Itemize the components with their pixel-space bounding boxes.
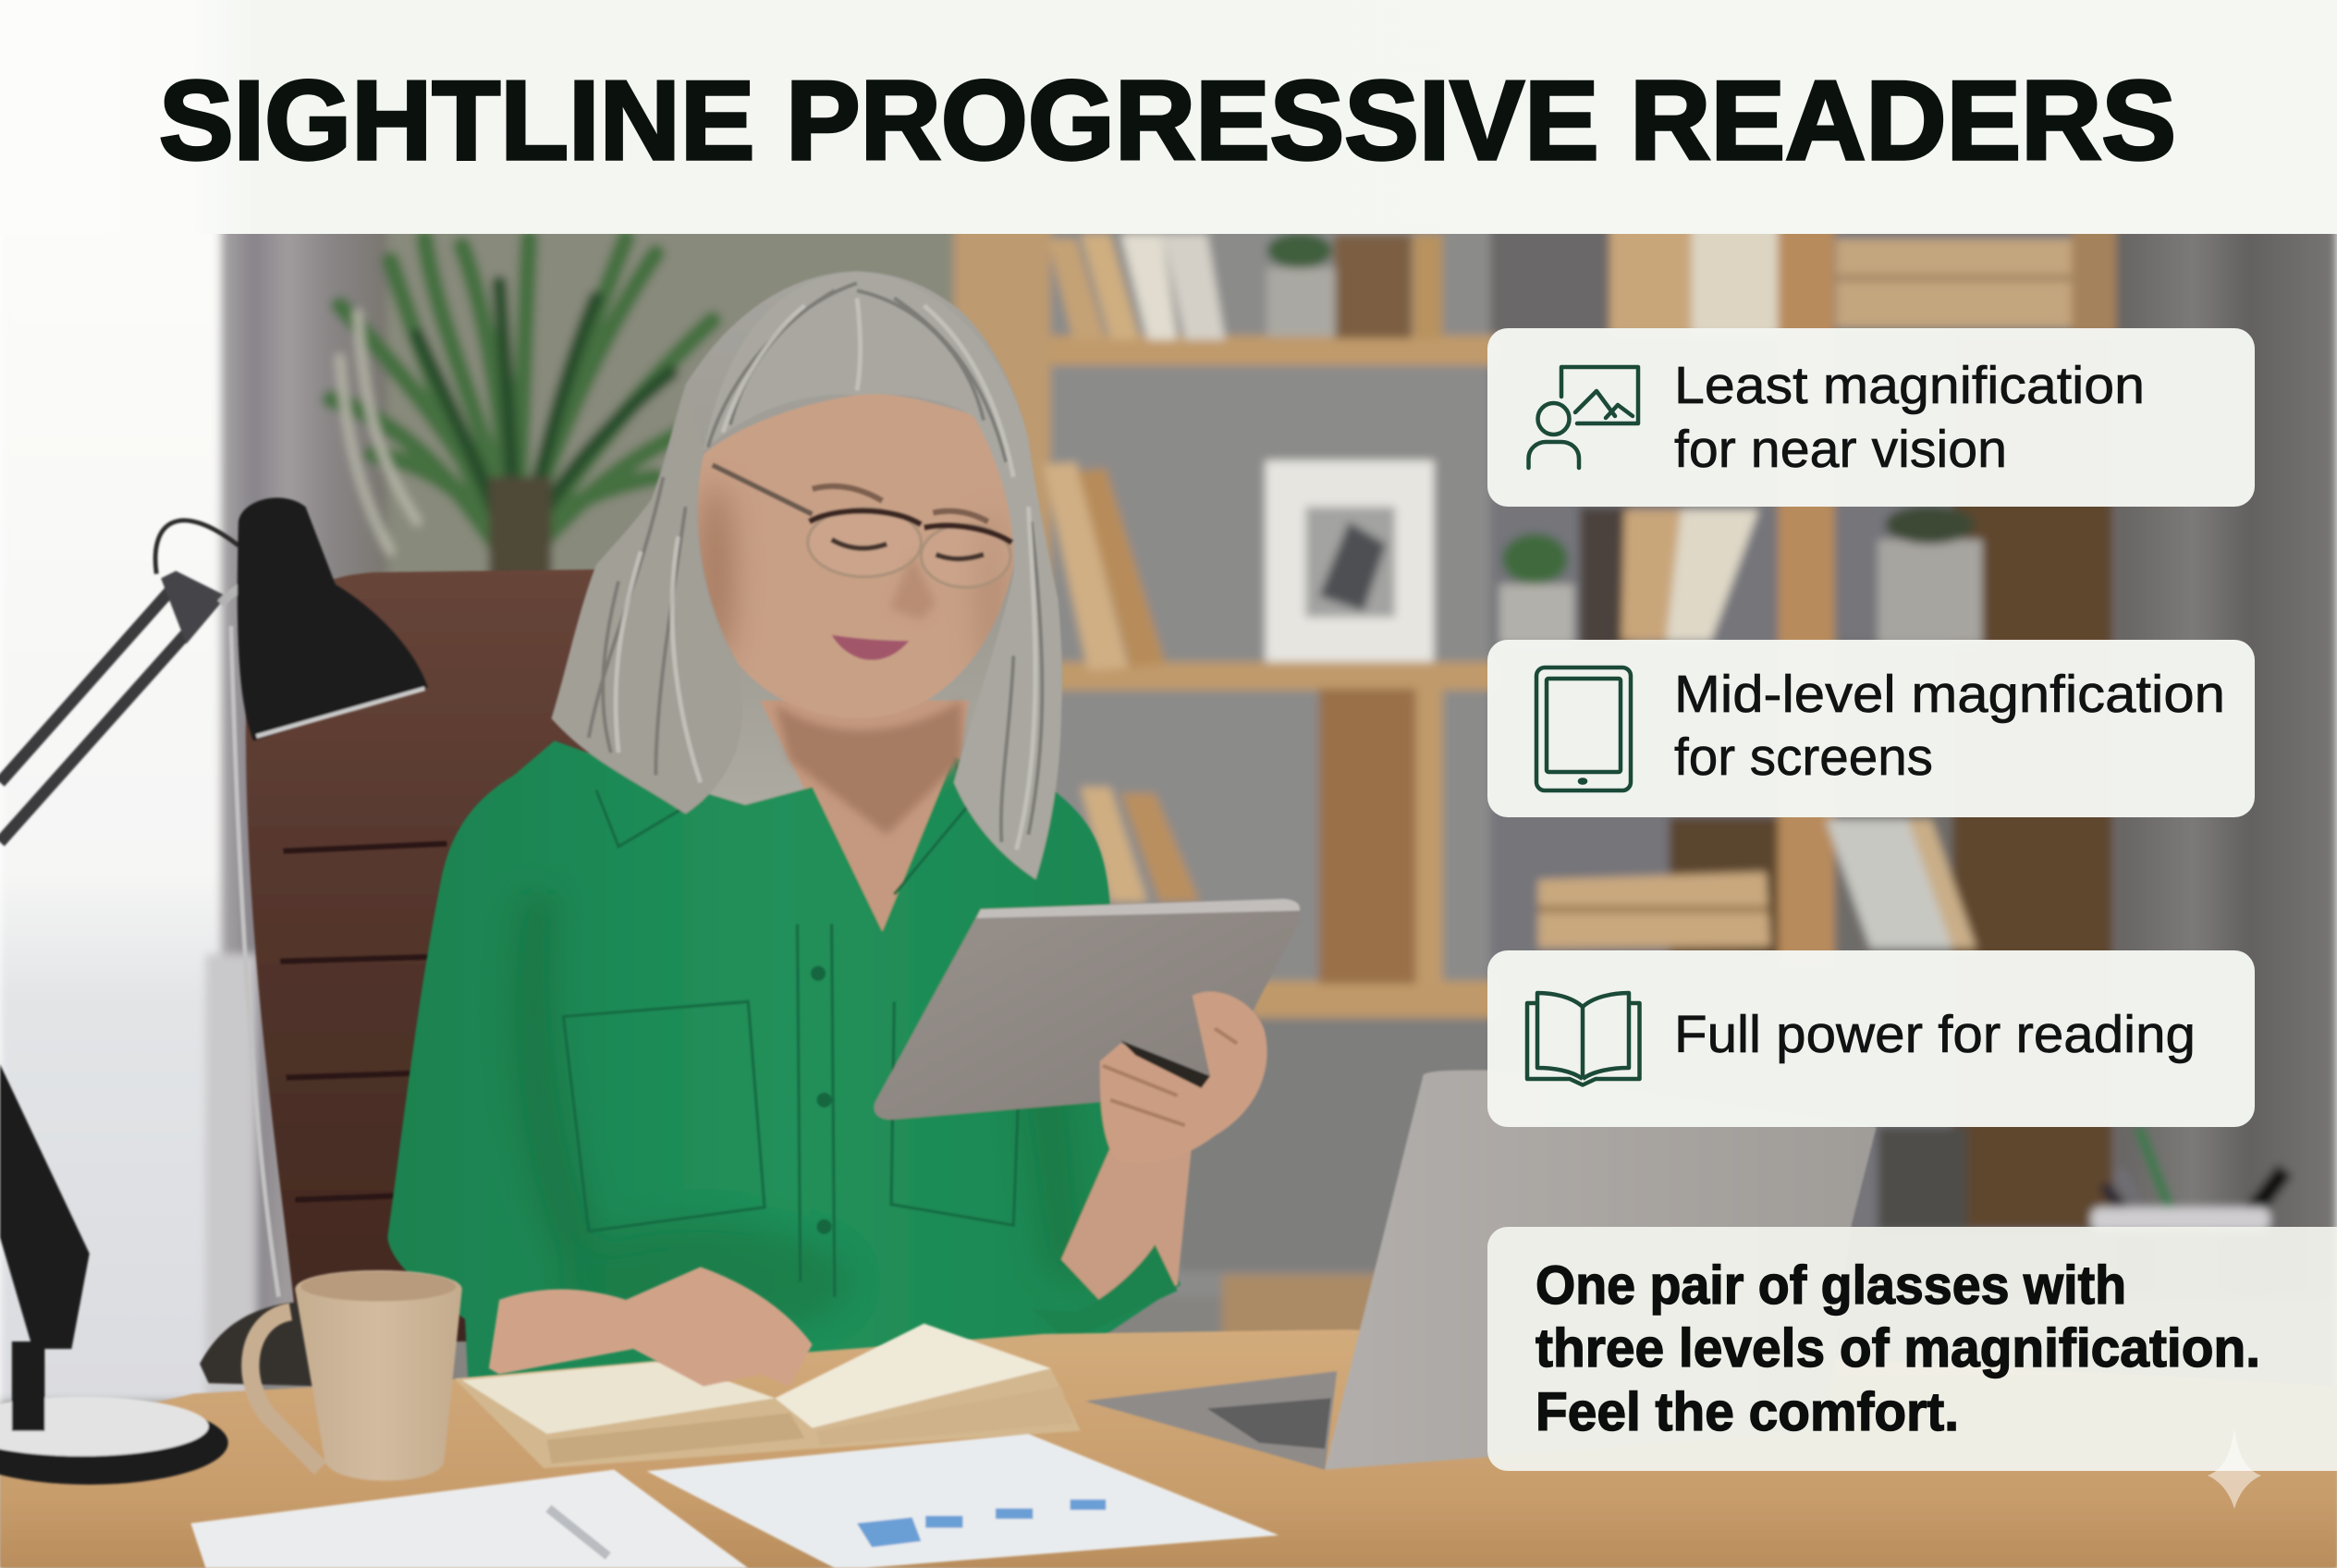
picture frame [1266, 460, 1434, 662]
text: full power for reading: Full power for reading [1674, 1005, 2196, 1064]
shirt shading [511, 894, 1088, 1341]
open book [455, 1324, 1081, 1468]
hand on tablet [1100, 991, 1267, 1164]
title: SIGHTLINE PROGRESSIVE READERS [159, 57, 2176, 183]
text: least magnification for near vision [1674, 356, 2145, 479]
office chair [200, 570, 604, 1386]
text: mid-level magnification for screens: Mid-level magnfication [1674, 665, 2225, 724]
icon: sparkle mark [2208, 1428, 2261, 1509]
icon: tablet [1536, 668, 1631, 790]
hand on book [489, 1267, 813, 1386]
panel: mid-level magnification [1487, 640, 2255, 817]
books lower left [1081, 787, 1147, 901]
papers [190, 1434, 1279, 1568]
callout text: three levels of magnification. [1536, 1318, 2260, 1378]
desk lamp [0, 497, 428, 1485]
icon: person with picture [1529, 367, 1638, 468]
bookshelf [954, 224, 2116, 1297]
laptop [1085, 1071, 1877, 1470]
panel: least magnification [1487, 328, 2255, 507]
header band [0, 0, 2337, 234]
lips [832, 635, 909, 660]
coffee mug [251, 1270, 462, 1481]
shirt details [563, 757, 1021, 1297]
pots and books between cards [1499, 584, 1573, 643]
books upper left [1047, 239, 1106, 340]
front hair strands [704, 271, 1061, 879]
callout: one pair of glasses [1487, 1227, 2337, 1471]
text: least magnification for near vision: for near vision [1674, 420, 2007, 479]
callout text [1536, 1256, 2260, 1442]
panel: full power [1487, 950, 2255, 1127]
glasses [713, 465, 1012, 587]
pens [2139, 1127, 2176, 1225]
desk [0, 1329, 2337, 1568]
text: mid-level magnification for screens [1674, 665, 2225, 787]
text: least magnification for near vision: Least magnification [1674, 356, 2145, 415]
callout text: Feel the comfort. [1536, 1382, 1959, 1442]
books middle left [1044, 462, 1128, 670]
text: mid-level magnification for screens: for screens [1674, 728, 1933, 787]
tablet [875, 899, 1300, 1120]
person [387, 271, 1300, 1378]
face [698, 394, 1014, 718]
forearm right [1061, 1140, 1193, 1312]
green shirt [387, 741, 1181, 1378]
small plant top [1266, 268, 1336, 337]
neck [760, 701, 969, 932]
hair back [552, 271, 1062, 879]
icon: open book [1527, 993, 1640, 1085]
callout text: One pair of glasses with [1536, 1256, 2126, 1316]
